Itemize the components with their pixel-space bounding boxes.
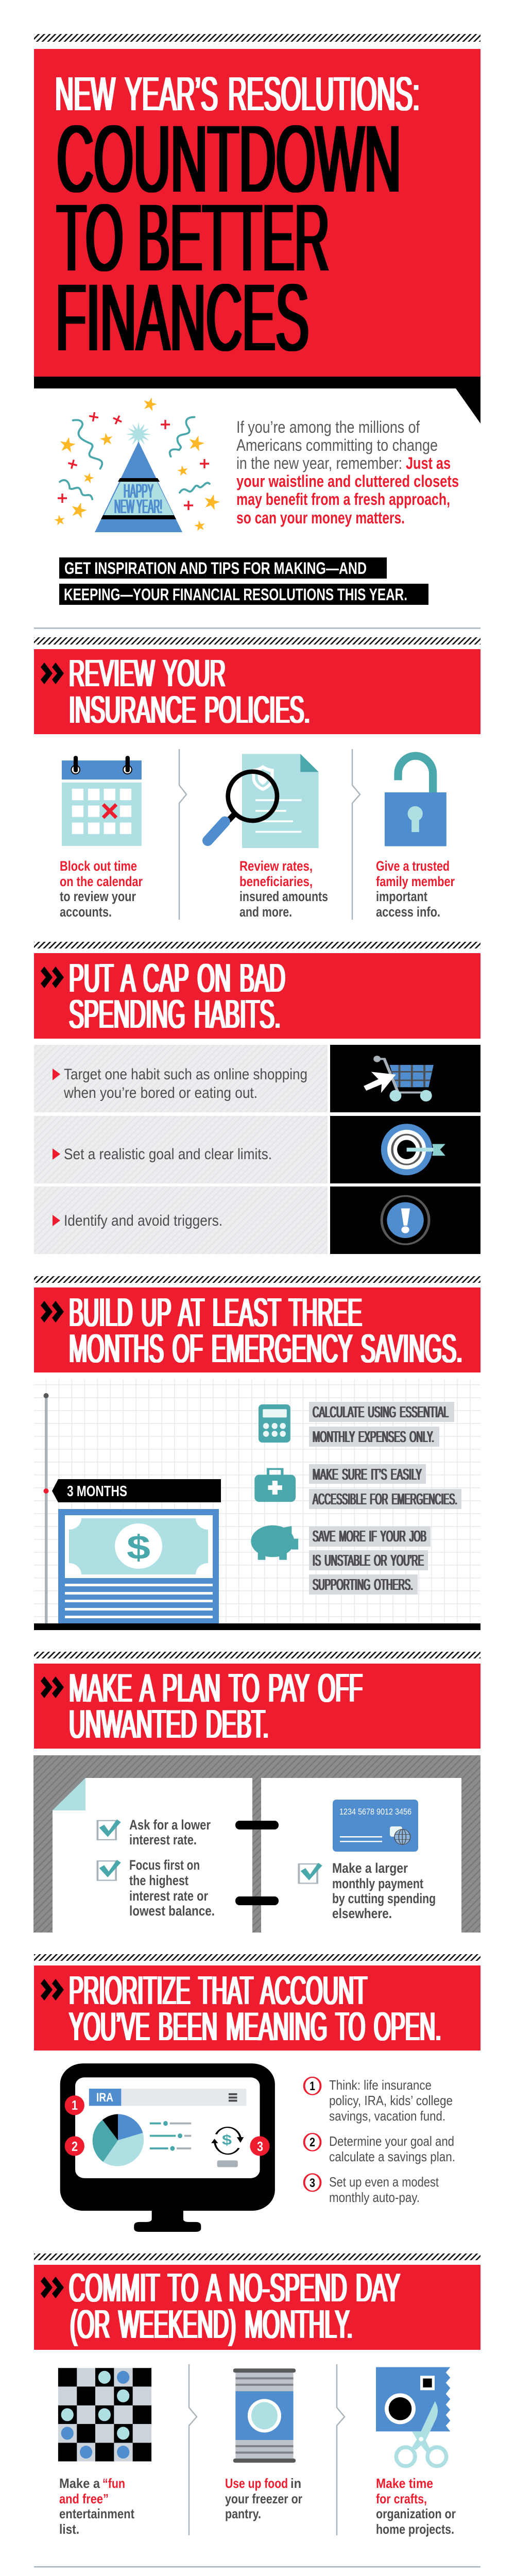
caption: use up food: pantry.: [225, 2506, 261, 2521]
money stack: [58, 1509, 219, 1623]
step 1: savings, vacation fund.: [329, 2108, 445, 2124]
icon: credit card: 1234 5678 9012 3456: [339, 1807, 411, 1817]
icon: calculator: [259, 1404, 290, 1443]
hat text: HAPPY: [124, 481, 153, 502]
main title: [56, 106, 401, 371]
notebook panel: [33, 1755, 480, 1933]
icon: alert panel: [330, 1187, 480, 1254]
icon: checkerboard: [58, 2368, 151, 2462]
intro paragraph: in the new year, remember:: [236, 454, 402, 472]
intro paragraph: so can your money matters.: [236, 509, 405, 527]
dashboard labels: 3: [257, 2139, 263, 2154]
section header: unwanted debt: UNWANTED DEBT.: [69, 1701, 269, 1747]
dashboard labels: $: [222, 2132, 232, 2148]
section header: review insurance: INSURANCE POLICIES.: [69, 688, 310, 731]
hatch strip: [34, 1954, 480, 1961]
checklist: focus first: lowest balance.: [129, 1903, 215, 1919]
intro paragraph: If you’re among the millions of: [236, 418, 420, 436]
step 1: Think: life insurance: [329, 2077, 432, 2093]
caption: calendar: accounts.: [60, 904, 112, 920]
step 3: monthly auto-pay.: [329, 2190, 420, 2205]
caption: use up food: [225, 2476, 302, 2521]
icon: food can: [233, 2368, 296, 2463]
checklist: larger payment: elsewhere.: [332, 1906, 392, 1921]
label: 3 months: 3 MONTHS: [67, 1483, 127, 1500]
dashboard labels: 2: [72, 2139, 78, 2154]
step 3: [304, 2174, 439, 2205]
step 2: calculate a savings plan.: [329, 2149, 455, 2164]
tip: accessible: MAKE SURE IT’S EASILY: [313, 1465, 422, 1483]
caption: calendar: Block out time: [60, 858, 137, 874]
hatch strip: [34, 637, 480, 645]
intro paragraph: [236, 418, 459, 527]
icon: open padlock: [385, 756, 447, 846]
caption: calendar: to review your: [60, 889, 136, 904]
caption: fun and free: and free”: [59, 2491, 109, 2506]
intro paragraph: your waistline and cluttered closets: [236, 472, 459, 490]
step 2: Determine your goal and: [329, 2133, 454, 2149]
checklist: larger payment: monthly payment: [332, 1876, 423, 1891]
arrow divider: [189, 2364, 197, 2535]
caption: use up food: Use up food: [225, 2476, 288, 2491]
step 1: policy, IRA, kids’ college: [329, 2093, 453, 2108]
hatch strip: [34, 1652, 480, 1658]
sliders: [150, 2121, 191, 2151]
caption: make time for crafts: home projects.: [376, 2521, 454, 2537]
party hat illustration with confetti: NEW YEAR!: [114, 496, 162, 518]
arrow divider: [337, 2364, 345, 2535]
caption: use up food: your freezer or: [225, 2491, 302, 2506]
caption: trusted family member: family member: [376, 874, 455, 889]
hat text: [114, 481, 162, 518]
row: target one habit: [34, 1045, 328, 1112]
icon: medical kit: [254, 1469, 296, 1502]
step 2: 2: [310, 2136, 315, 2149]
caption: fun and free: Make a: [59, 2476, 100, 2491]
caption: trusted family member: Give a trusted: [376, 858, 450, 874]
savings chart axis: [43, 1393, 48, 1623]
section header: unwanted debt: [34, 1664, 480, 1749]
arrow divider: [352, 749, 360, 920]
caption: calendar: on the calendar: [60, 874, 143, 889]
arrow divider: [179, 749, 186, 920]
checklist: lower interest rate: [97, 1817, 211, 1848]
caption: review rates: beneficiaries,: [239, 874, 313, 889]
checklist: larger payment: Make a larger: [332, 1860, 408, 1876]
section header: emergency savings: [34, 1287, 480, 1372]
checklist: larger payment: [299, 1860, 436, 1921]
icon: computer monitor with account dashboard: [60, 2063, 275, 2232]
section header: bad spending habits: [34, 953, 480, 1039]
caption: fun and free: list.: [59, 2521, 79, 2537]
caption: trusted family member: [376, 858, 455, 920]
label: 3 months: [52, 1479, 221, 1502]
caption: make time for crafts: organization or: [376, 2506, 456, 2521]
black callout banners: GET INSPIRATION AND TIPS FOR MAKING—AND: [64, 559, 367, 578]
caption: fun and free: [59, 2476, 134, 2537]
hatch strip: [34, 942, 480, 948]
black callout banners: KEEPING—YOUR FINANCIAL RESOLUTIONS THIS YEAR.: [64, 585, 407, 604]
caption: review rates: insured amounts: [239, 889, 328, 904]
step 1: [304, 2077, 453, 2124]
caption: calendar: [60, 858, 143, 920]
section header: open that account: [34, 1965, 480, 2050]
checklist: focus first: Focus first on: [129, 1857, 200, 1873]
dashboard labels: [72, 2091, 263, 2154]
binder clips: [235, 1821, 279, 1905]
step 3: Set up even a modest: [329, 2174, 439, 2190]
IRA tab: [89, 2089, 246, 2106]
caption: fun and free: entertainment: [59, 2506, 134, 2521]
hat body: [95, 442, 182, 532]
intro paragraph: may benefit from a fresh approach,: [236, 490, 450, 509]
party hat illustration with confetti: [54, 396, 221, 532]
intro paragraph: Just as: [406, 454, 451, 472]
step 1: 1: [310, 2079, 315, 2093]
caption: make time for crafts: for crafts,: [376, 2491, 427, 2506]
page corner fold: [53, 1778, 85, 1810]
tip: save more: IS UNSTABLE OR YOU’RE: [313, 1551, 424, 1569]
money stack: $: [127, 1528, 150, 1566]
section header: review insurance: REVIEW YOUR: [69, 652, 226, 694]
tip: save more: SAVE MORE IF YOUR JOB: [313, 1527, 426, 1545]
confetti plus marks: [58, 412, 209, 510]
row: realistic goal: Set a realistic goal and clear limits.: [64, 1146, 272, 1163]
confetti squiggles: [60, 417, 210, 499]
row: avoid triggers: Identify and avoid triggers.: [64, 1212, 222, 1229]
section header: bad spending habits: PUT A CAP ON BAD: [69, 955, 285, 1001]
caption: make time for crafts: Make time: [376, 2476, 433, 2491]
icon: fabric and scissors: [376, 2367, 450, 2466]
row: avoid triggers: [34, 1187, 328, 1254]
checklist: lower interest rate: interest rate.: [129, 1832, 197, 1848]
section header: review insurance: [34, 649, 480, 734]
icon: piggy bank: [251, 1526, 298, 1560]
dashboard labels: 1: [72, 2097, 78, 2113]
row: target one habit: when you’re bored or eating out.: [63, 1084, 258, 1101]
checklist: focus first: the highest: [129, 1873, 188, 1888]
checklist: larger payment: by cutting spending: [332, 1891, 436, 1906]
intro paragraph: Americans committing to change: [236, 436, 438, 454]
caption: review rates: Review rates,: [239, 858, 313, 874]
caption: use up food: in: [290, 2476, 301, 2491]
step 2: [304, 2133, 455, 2164]
tip: save more: [309, 1527, 431, 1595]
checklist: lower interest rate: Ask for a lower: [129, 1817, 211, 1833]
confetti stars: [54, 396, 221, 532]
section header: no-spend day: [34, 2265, 480, 2350]
caption: trusted family member: access info.: [376, 904, 440, 920]
caption: fun and free: “fun: [102, 2476, 125, 2491]
caption: review rates: and more.: [239, 904, 292, 920]
checklist: focus first: [97, 1857, 215, 1919]
checklist: focus first: interest rate or: [129, 1888, 208, 1904]
tip: save more: SUPPORTING OTHERS.: [313, 1575, 413, 1594]
icon: document and magnifier: [208, 754, 319, 848]
right page: [261, 1778, 461, 1933]
top hatch strip: [34, 34, 480, 42]
caption: review rates: [239, 858, 328, 920]
row: target one habit: Target one habit such as online shopping: [64, 1066, 307, 1083]
section header: bad spending habits: SPENDING HABITS.: [69, 991, 281, 1037]
title panel: [34, 49, 480, 423]
left page: [53, 1778, 252, 1933]
caption: make time for crafts: [376, 2476, 456, 2537]
black callout banners: [59, 557, 428, 605]
row: realistic goal: [34, 1116, 328, 1183]
icon: shopping cart panel: [330, 1045, 480, 1112]
icon: credit card: [333, 1800, 418, 1852]
icon: calendar: [62, 756, 142, 846]
icon: target panel: [330, 1116, 480, 1183]
tip: calculate: [309, 1402, 454, 1447]
hatch strip: [34, 2253, 480, 2260]
hat burst: [126, 422, 151, 447]
hatch strip: [34, 1276, 480, 1283]
caption: trusted family member: important: [376, 889, 427, 904]
tip: accessible: [309, 1464, 461, 1509]
refresh arrows: [211, 2127, 244, 2154]
step 3: 3: [310, 2176, 315, 2190]
dashboard labels: IRA: [96, 2091, 113, 2105]
pie chart: [93, 2114, 144, 2166]
